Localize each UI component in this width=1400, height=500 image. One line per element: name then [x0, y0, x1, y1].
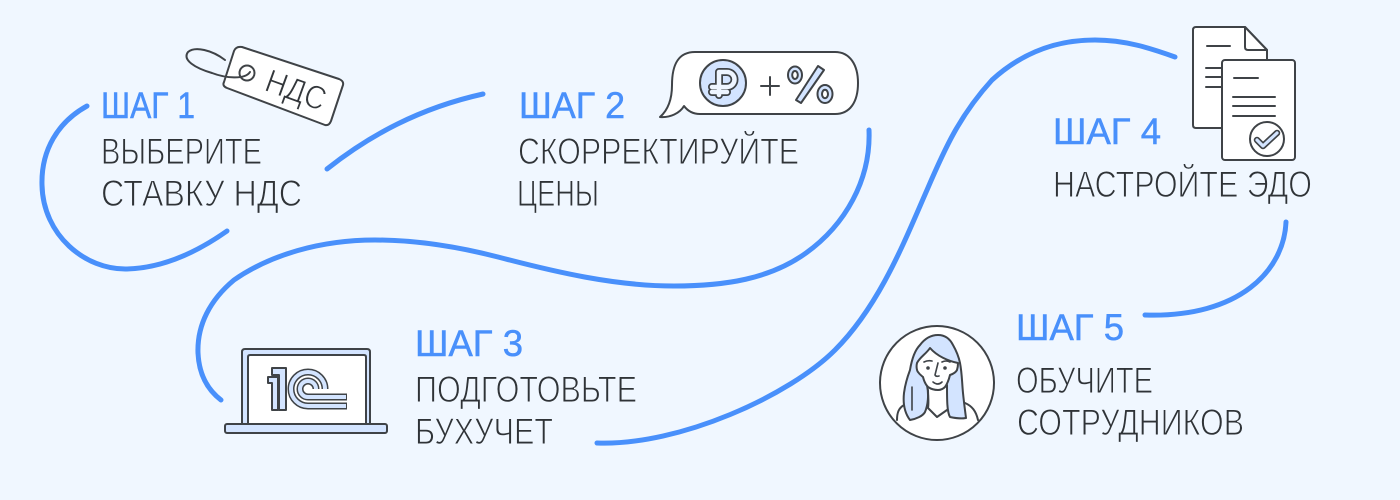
arrow: step 4 to step 5 [1145, 222, 1286, 315]
panel: step 5 [880, 307, 1244, 443]
text: step 2: СКОРРЕКТИРУЙТЕ [518, 130, 799, 172]
icon: speech bubble with ruble and percent [660, 52, 858, 117]
text: step 1: ВЫБЕРИТЕ [101, 131, 262, 172]
text: step 5 [1016, 360, 1244, 443]
panel: step 2 [517, 52, 858, 214]
text: step 4: НАСТРОЙТЕ ЭДО [1053, 163, 1312, 205]
icon: documents with check mark [1193, 27, 1295, 160]
icon: VAT tag [187, 47, 343, 125]
heading: step 4: ШАГ 4 [1053, 111, 1161, 152]
text: step 2 [517, 130, 799, 214]
heading: step 5: ШАГ 5 [1016, 307, 1124, 348]
heading: step 2: ШАГ 2 [519, 85, 625, 126]
text: step 3 [415, 369, 637, 452]
text: step 5: СОТРУДНИКОВ [1017, 402, 1244, 443]
text: step 2: ЦЕНЫ [517, 173, 599, 214]
panel: step 1 [101, 47, 343, 214]
icon: woman portrait [880, 326, 994, 440]
text: step 3: БУХУЧЕТ [415, 411, 553, 452]
text: step 1 [101, 131, 302, 214]
arrow: step 3 to step 4 [597, 40, 1175, 443]
panel: step 3 [225, 323, 637, 452]
heading: step 1: ШАГ 1 [101, 85, 195, 126]
arrow: step 1 to step 2 [327, 94, 483, 169]
icon: laptop with 1C logo [225, 349, 387, 433]
arrow: step 2 to step 3 [198, 130, 869, 400]
heading: step 3: ШАГ 3 [415, 323, 523, 364]
curve: around step 1 [42, 106, 227, 269]
text: step 3: ПОДГОТОВЬТЕ [415, 369, 637, 410]
icon: VAT tag: НДС [261, 62, 332, 118]
text: step 1: СТАВКУ НДС [101, 173, 302, 214]
text: step 5: ОБУЧИТЕ [1016, 360, 1153, 401]
panel: step 4 [1053, 27, 1312, 205]
